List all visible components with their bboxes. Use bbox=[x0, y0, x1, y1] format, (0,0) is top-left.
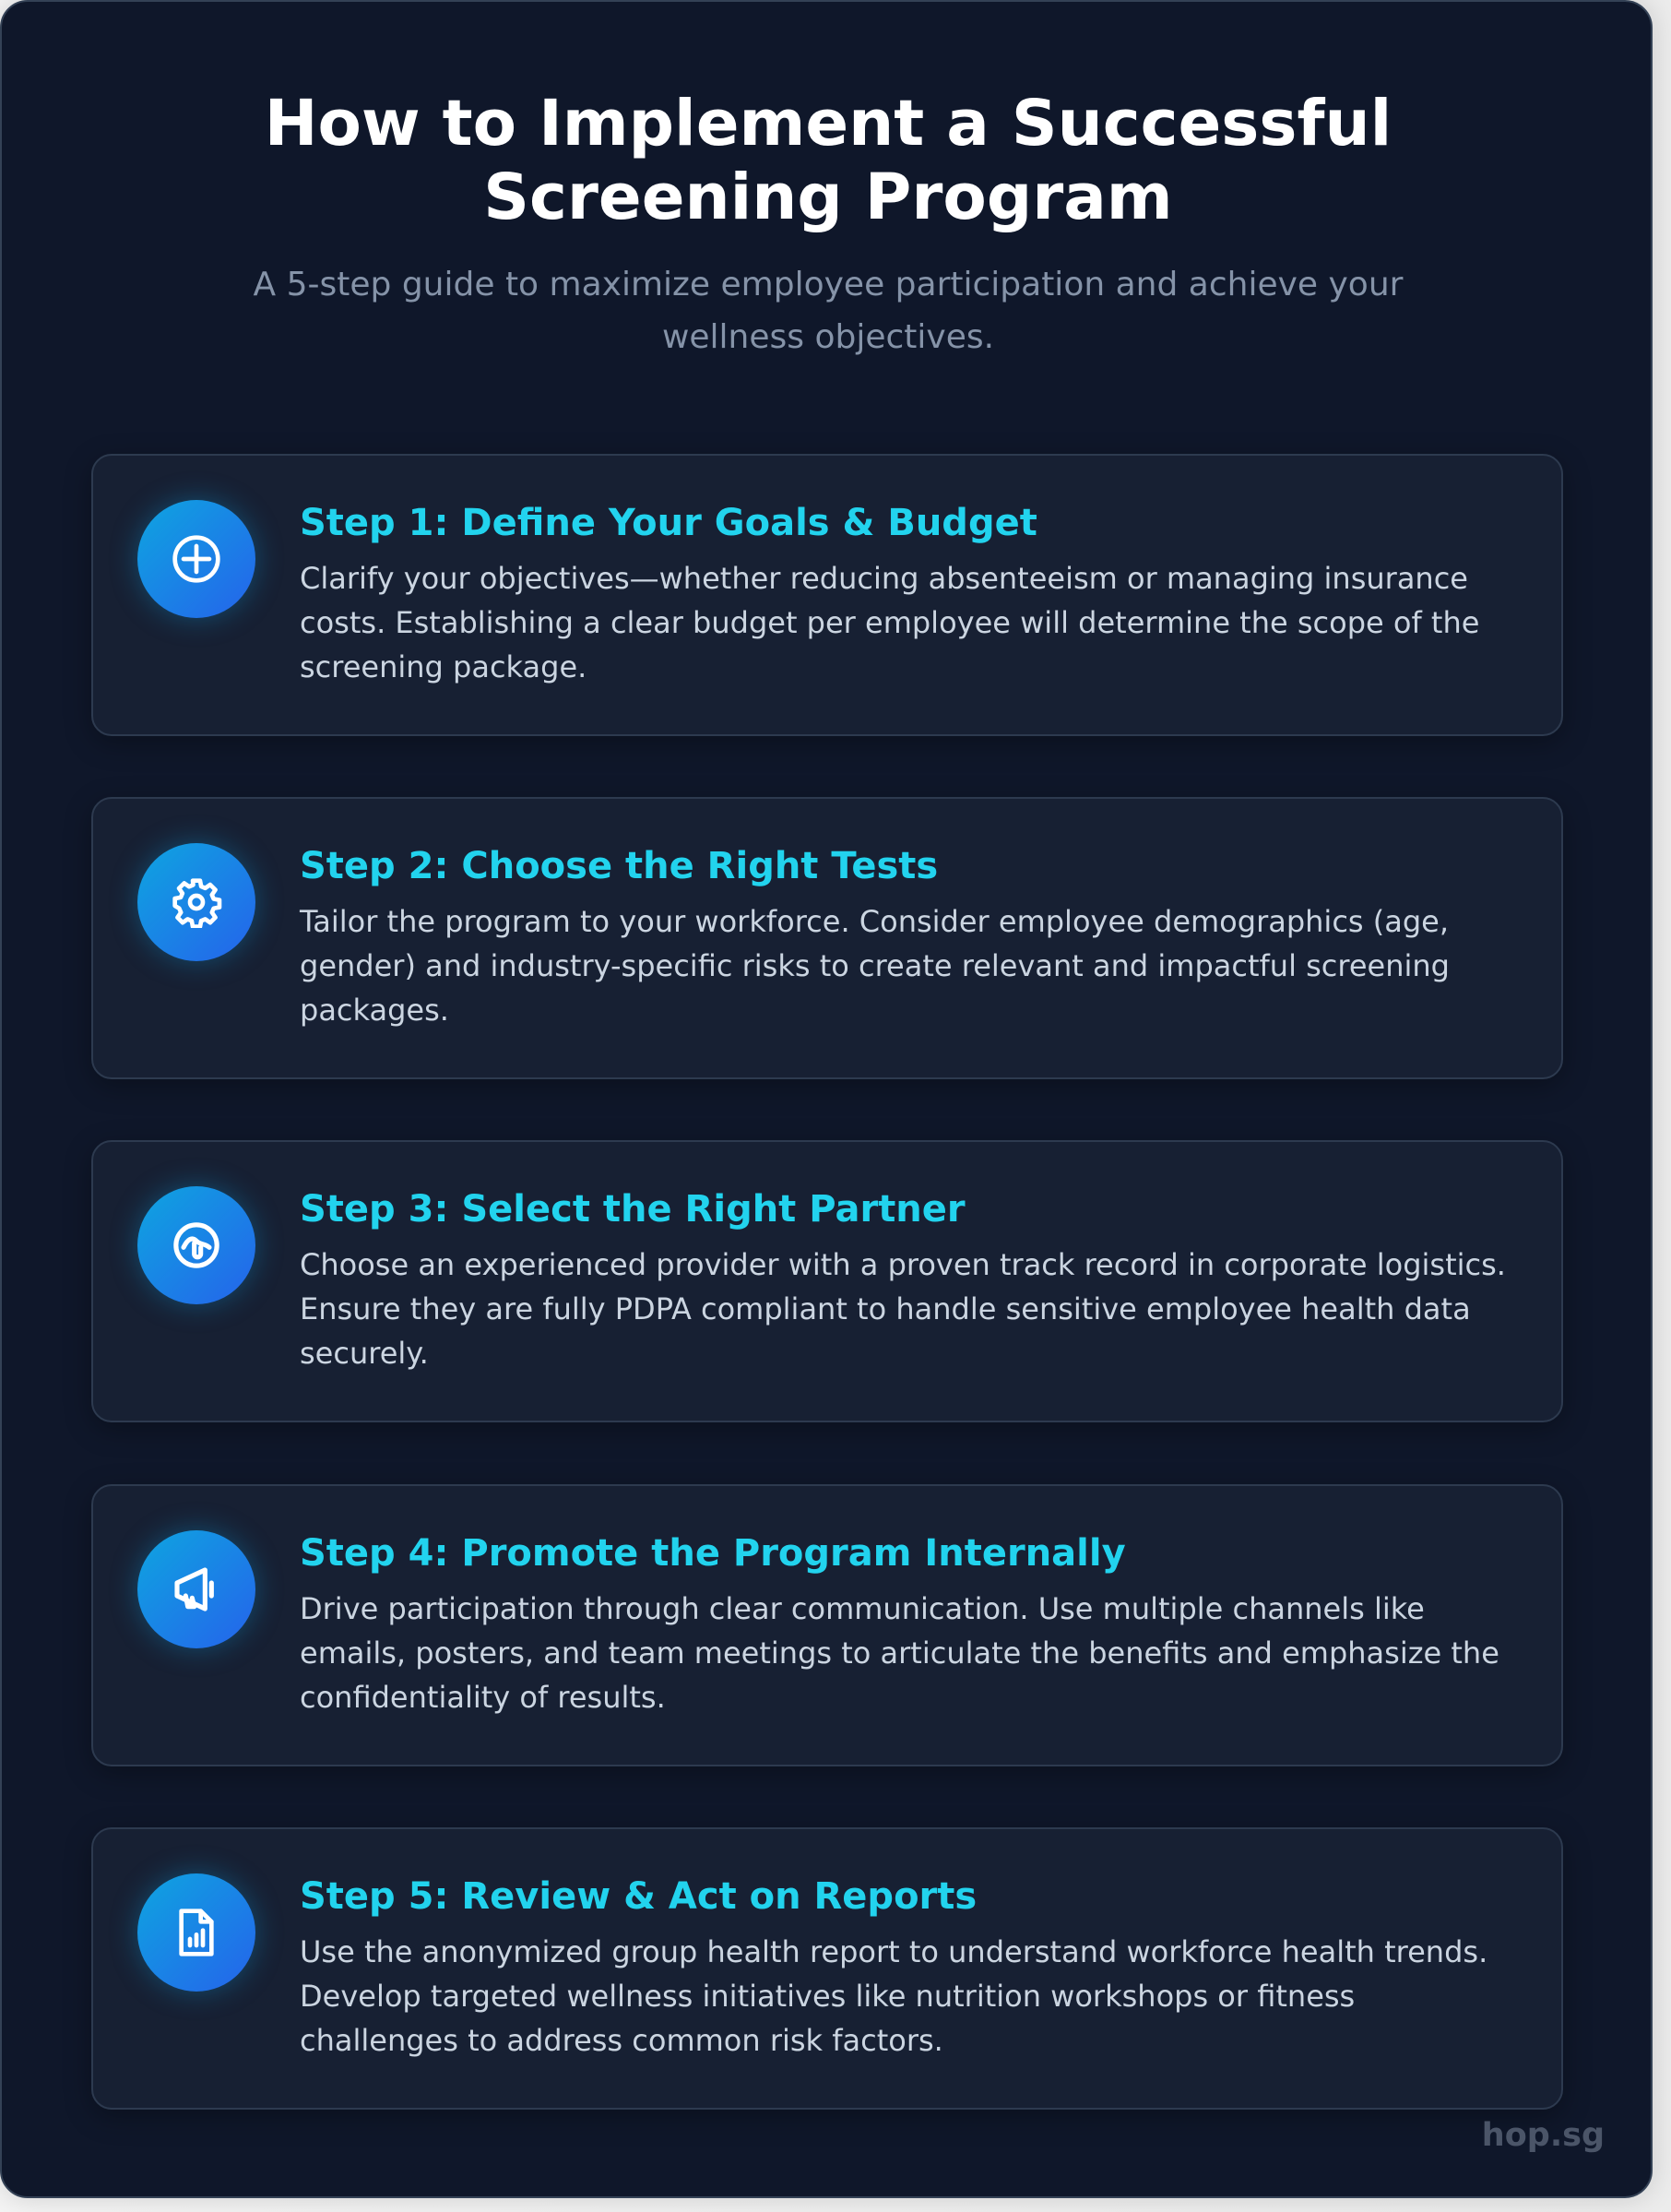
text: Clarify your objectives—whether reducing absenteeism or managing insurance costs. Establishing a clear budget per employee will determine the scope of the screening package. bbox=[300, 561, 1479, 684]
heading: Step 5: Review & Act on Reports bbox=[300, 1875, 977, 1918]
subtitle: A 5-step guide to maximize employee participation and achieve your wellness objectives. bbox=[254, 266, 1403, 356]
title: Screening Program bbox=[483, 161, 1173, 234]
panel: step 2 bbox=[91, 797, 1563, 1079]
watermark: hop.sg bbox=[1482, 2117, 1605, 2154]
text: Tailor the program to your workforce. Consider employee demographics (age, gender) and industry-specific risks to create relevant and impactful screening packages. bbox=[300, 904, 1450, 1028]
title bbox=[265, 87, 1392, 234]
icon: megaphone bbox=[137, 1530, 255, 1648]
title: How to Implement a Successful bbox=[265, 87, 1392, 161]
panel: step 5 bbox=[91, 1827, 1563, 2110]
text: Drive participation through clear communication. Use multiple channels like emails, posters, and team meetings to articulate the benefits and emphasize the confidentiality of results. bbox=[300, 1591, 1499, 1715]
panel: step 1 bbox=[91, 454, 1563, 736]
text: Choose an experienced provider with a proven track record in corporate logistics. Ensure they are fully PDPA compliant to handle sensitive employee health data securely. bbox=[300, 1247, 1506, 1371]
heading: Step 3: Select the Right Partner bbox=[300, 1188, 966, 1231]
icon: handshake circle bbox=[137, 1186, 255, 1304]
heading: Step 1: Define Your Goals & Budget bbox=[300, 502, 1037, 544]
panel: step 4 bbox=[91, 1484, 1563, 1766]
heading: Step 2: Choose the Right Tests bbox=[300, 845, 938, 887]
text: Use the anonymized group health report to understand workforce health trends. Develop targeted wellness initiatives like nutrition workshops or fitness challenges to address common risk factors. bbox=[300, 1934, 1487, 2058]
heading: Step 4: Promote the Program Internally bbox=[300, 1532, 1126, 1575]
icon: gear bbox=[137, 843, 255, 961]
icon: report document bbox=[137, 1873, 255, 1992]
icon: plus circle bbox=[137, 500, 255, 618]
panel: step 3 bbox=[91, 1140, 1563, 1422]
